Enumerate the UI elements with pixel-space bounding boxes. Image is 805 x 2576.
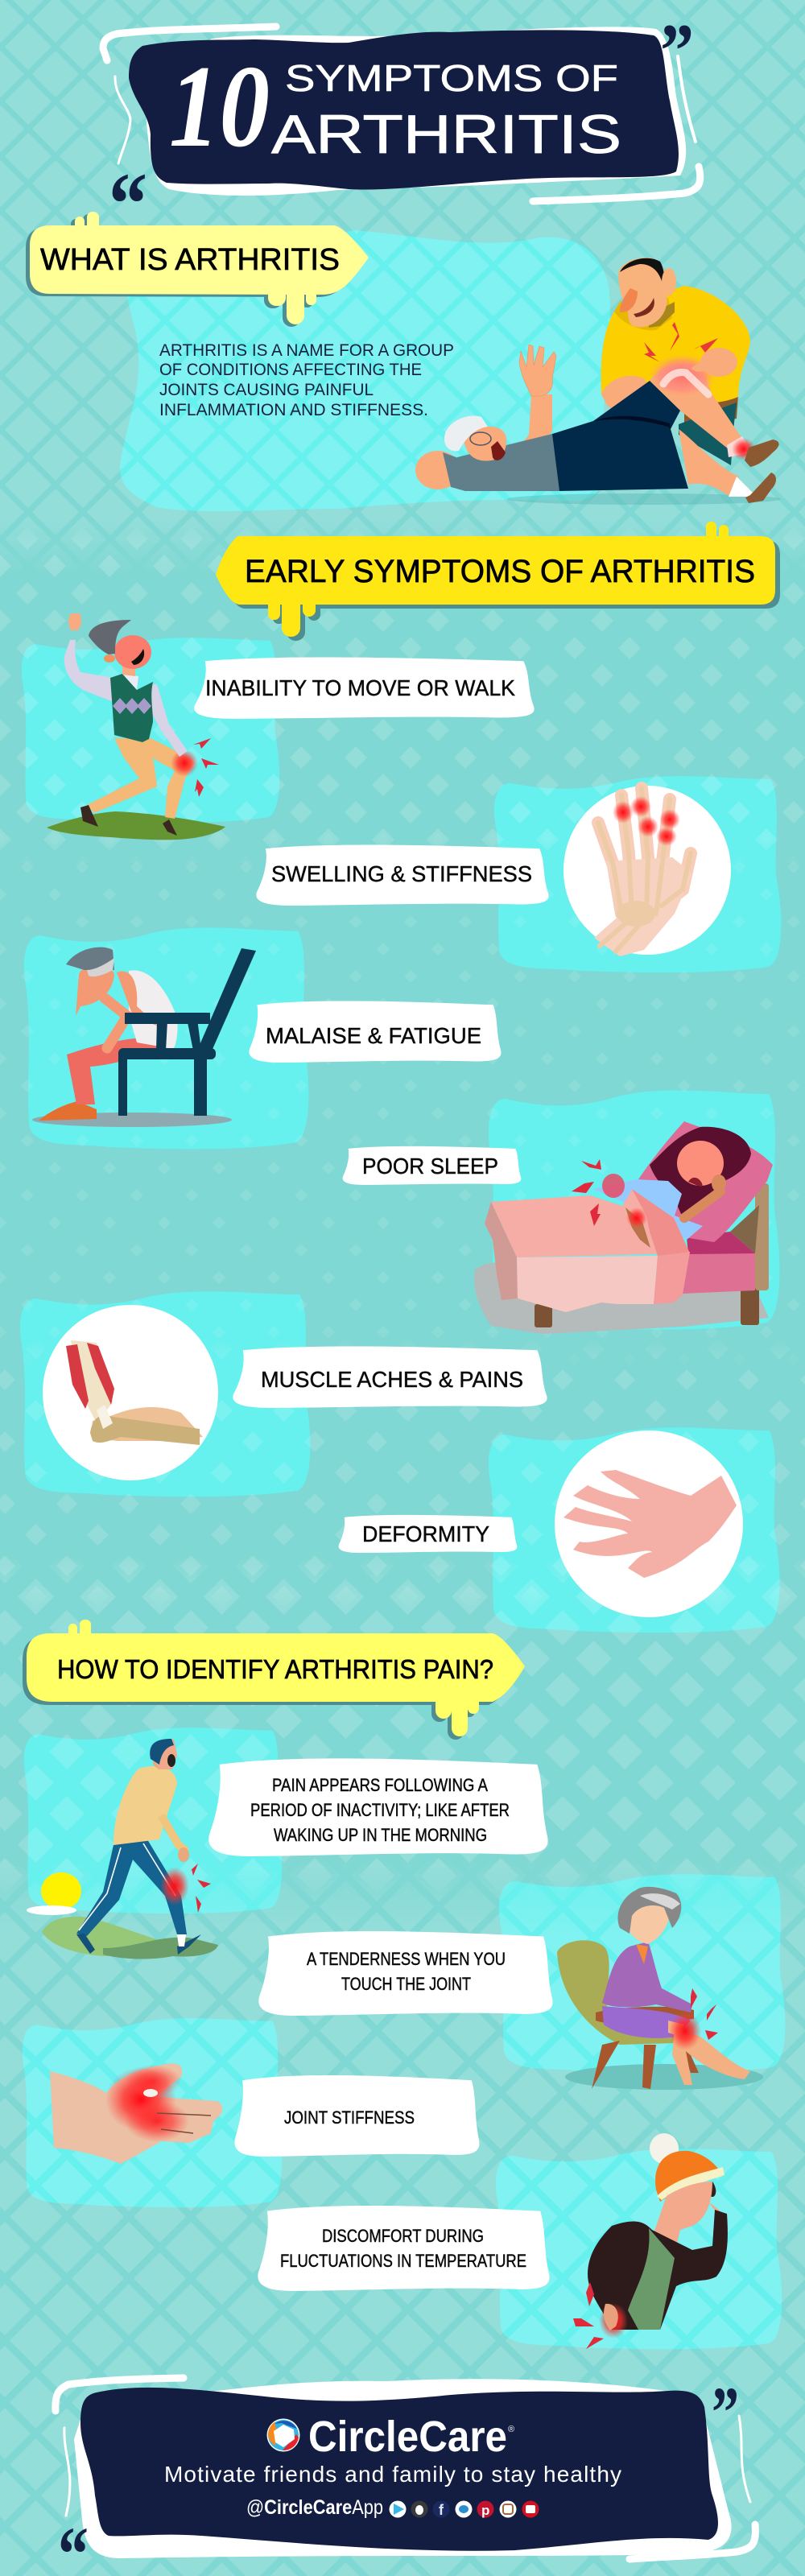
title block [103, 8, 700, 253]
icon: circlecare logo [267, 2418, 299, 2452]
label: tenderness when touching joint: A TENDERNESS WHEN YOU [307, 1949, 506, 1969]
panel: inactivity pain backdrop [24, 1728, 282, 1913]
panel: temperature backdrop [496, 2149, 782, 2349]
heading banner: how to identify: HOW TO IDENTIFY ARTHRITIS PAIN? [57, 1654, 493, 1684]
icons: social media row: p [481, 2503, 489, 2518]
title block: “ [109, 155, 147, 253]
label: discomfort with temperature: DISCOMFORT DURING [322, 2226, 484, 2246]
illustration: hand x-ray in circle [564, 786, 731, 956]
text block: arthritis definition: ARTHRITIS IS A NAME FOR A GROUP [159, 341, 454, 360]
panel: swelling backdrop [494, 776, 781, 972]
text block: arthritis definition [159, 341, 454, 419]
icons: social media row: f [439, 2502, 444, 2518]
label: discomfort with temperature [258, 2206, 550, 2291]
illustration: man examining older man's knee [415, 258, 781, 505]
illustration: woman in bed with joint pain [474, 1121, 773, 1334]
label: pain after inactivity [208, 1758, 548, 1856]
illustration: seated older woman touching knee [557, 1887, 763, 2090]
panel: inability backdrop [22, 638, 279, 823]
title block: ” [660, 8, 694, 93]
footer panel: CircleCare [308, 2413, 507, 2461]
panel: deformity backdrop [489, 1427, 779, 1633]
title block: ARTHRITIS [271, 104, 621, 165]
heading banner: early symptoms: EARLY SYMPTOMS OF ARTHRITIS [245, 554, 755, 589]
panel: poor sleep backdrop [489, 1090, 779, 1330]
footer panel: @CircleCareApp [246, 2496, 383, 2519]
text block: arthritis definition: INFLAMMATION AND STIFFNESS. [159, 401, 428, 419]
label: malaise and fatigue: MALAISE & FATIGUE [266, 1023, 481, 1048]
panel: malaise backdrop [24, 927, 308, 1149]
illustration: woman in winter hat [573, 2133, 729, 2349]
footer panel: Motivate friends and family to stay healthy [164, 2462, 621, 2487]
text block: arthritis definition: OF CONDITIONS AFFECTING THE [159, 361, 422, 379]
panel: joint stiffness backdrop [23, 2018, 282, 2207]
label: swelling and stiffness [256, 844, 549, 906]
label: inability to move or walk: INABILITY TO MOVE OR WALK [205, 675, 515, 700]
heading banner: what is arthritis: WHAT IS ARTHRITIS [40, 243, 340, 277]
illustration: older man with knee pain [47, 613, 225, 840]
label: inability to move or walk [194, 657, 535, 719]
label: discomfort with temperature: FLUCTUATIONS IN TEMPERATURE [280, 2251, 526, 2271]
panel: tenderness backdrop [499, 1874, 785, 2073]
label: joint stiffness [234, 2075, 479, 2157]
footer panel [56, 2373, 755, 2576]
footer panel: ® [508, 2425, 514, 2434]
text block: arthritis definition: JOINTS CAUSING PAINFUL [159, 381, 374, 399]
illustration: man with knee pain, sunrise [27, 1739, 218, 1959]
label: deformity [339, 1515, 517, 1553]
footer panel: ” [712, 2373, 739, 2453]
label: muscle aches and pains: MUSCLE ACHES & PAINS [261, 1367, 523, 1392]
panel: what is arthritis backdrop [120, 230, 610, 511]
title block: 10 [169, 41, 270, 171]
label: deformity: DEFORMITY [362, 1521, 489, 1546]
illustration: deformed hand in circle [555, 1430, 743, 1617]
illustration: fatigued man on chair [32, 947, 256, 1127]
panel: muscle aches backdrop [20, 1291, 310, 1496]
illustration: elbow muscle in circle [43, 1305, 218, 1480]
label: poor sleep [343, 1146, 521, 1185]
label: poor sleep: POOR SLEEP [362, 1154, 498, 1179]
label: joint stiffness: JOINT STIFFNESS [284, 2107, 415, 2128]
label: muscle aches and pains [233, 1346, 547, 1408]
icons: social media row [390, 2500, 539, 2518]
heading banner: what is arthritis [26, 212, 369, 327]
label: pain after inactivity: WAKING UP IN THE MORNING [274, 1825, 487, 1845]
label: malaise and fatigue [249, 1001, 501, 1063]
label: pain after inactivity: PAIN APPEARS FOLLOWING A [272, 1775, 488, 1795]
heading banner: early symptoms [216, 522, 780, 641]
heading banner: how to identify [23, 1620, 525, 1740]
label: swelling and stiffness: SWELLING & STIFFNESS [271, 861, 532, 886]
label: tenderness when touching joint [258, 1931, 553, 2016]
illustration: inflamed hand [50, 2063, 222, 2164]
label: tenderness when touching joint: TOUCH THE JOINT [341, 1974, 471, 1994]
label: pain after inactivity: PERIOD OF INACTIVITY; LIKE AFTER [250, 1800, 510, 1820]
title block: SYMPTOMS OF [285, 57, 618, 99]
